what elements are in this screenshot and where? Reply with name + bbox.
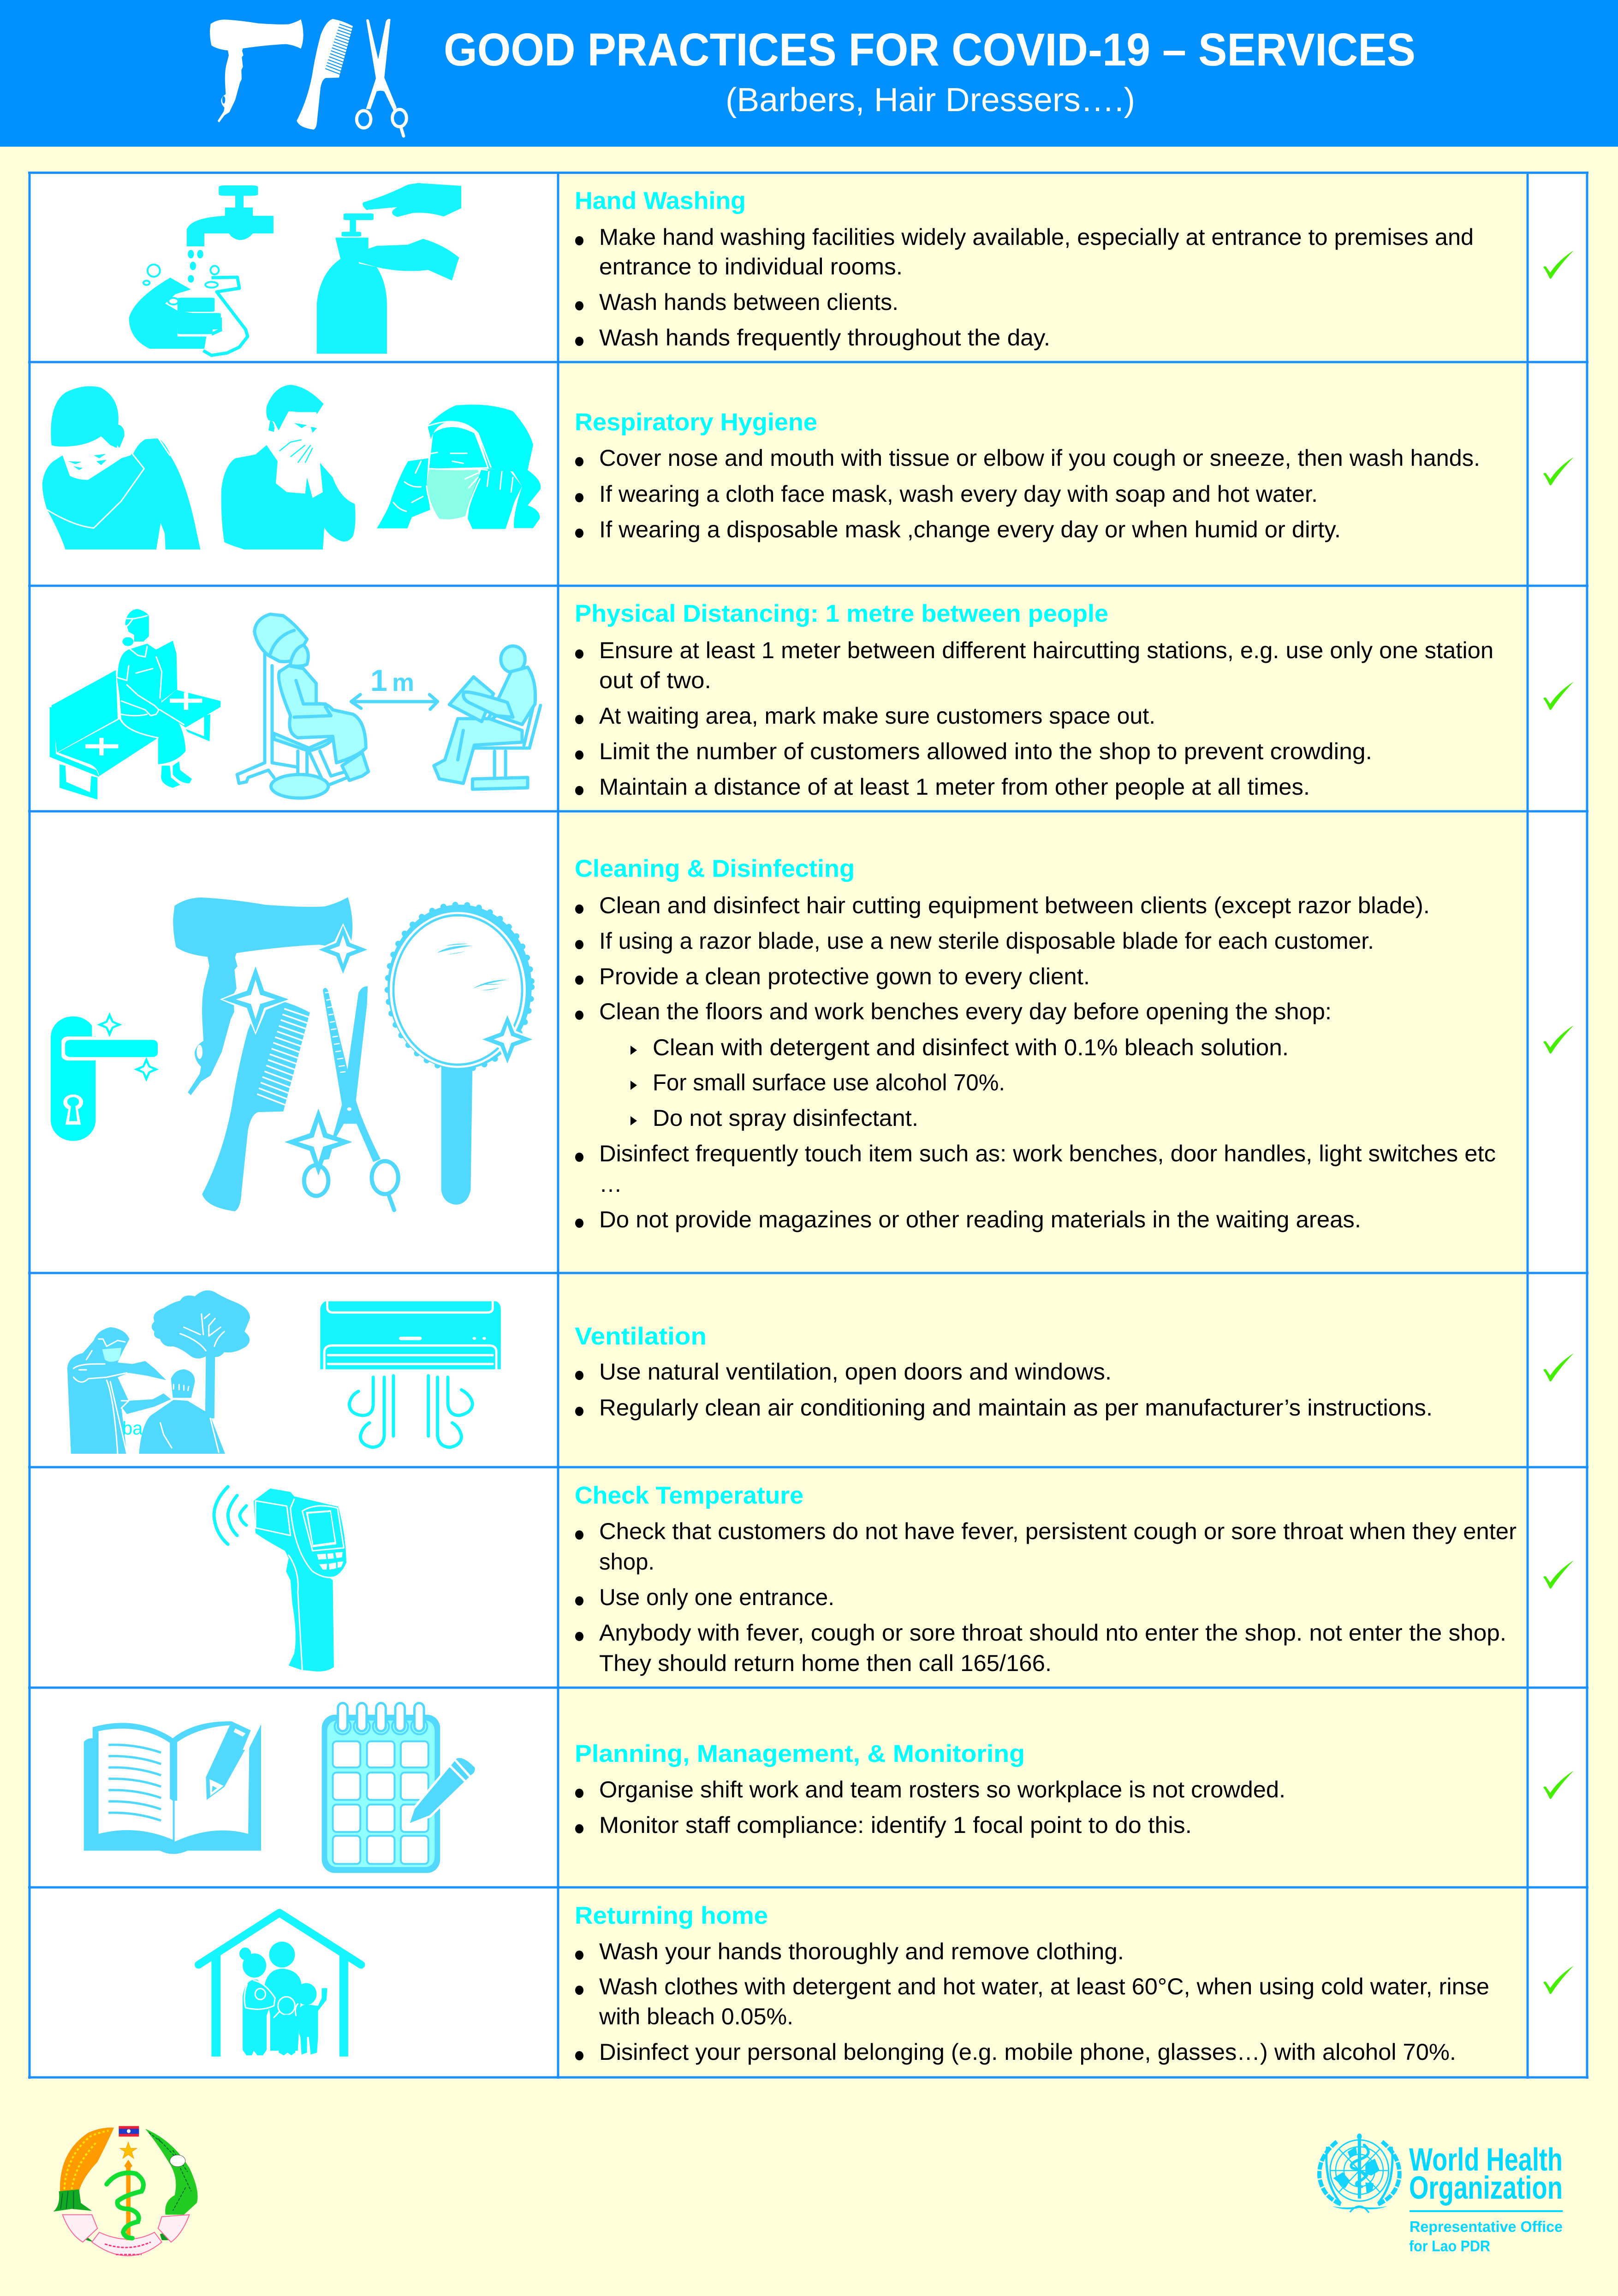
heading: Ventilation bbox=[575, 1323, 707, 1350]
bullet list bbox=[575, 1939, 1489, 2065]
header banner bbox=[0, 0, 1618, 147]
bullet list: Do not spray disinfectant. bbox=[653, 1105, 918, 1131]
panel: Cleaning and Disinfecting bbox=[51, 855, 1574, 1232]
bullet list bbox=[575, 892, 1496, 1232]
bullet list: entrance to individual rooms. bbox=[599, 254, 903, 280]
bullet list: If wearing a cloth face mask, wash every day with soap and hot water. bbox=[599, 481, 1318, 507]
bullet list: Ensure at least 1 meter between different haircutting stations, e.g. use only one station bbox=[599, 637, 1493, 663]
distance label: m bbox=[392, 669, 414, 696]
bullet list bbox=[575, 1359, 1433, 1421]
bullet list: Provide a clean protective gown to every client. bbox=[599, 964, 1090, 989]
icon: check mark bbox=[1543, 1966, 1574, 1994]
bullet list: Cover nose and mouth with tissue or elbow if you cough or sneeze, then wash hands. bbox=[599, 445, 1480, 471]
icon: tap and hand washing bbox=[129, 183, 461, 355]
bullet list: out of two. bbox=[599, 667, 711, 693]
panel: Check Temperature bbox=[214, 1482, 1574, 1676]
icon: check mark bbox=[1543, 250, 1574, 279]
logo: World Health Organization bbox=[1319, 2134, 1563, 2254]
title: GOOD PRACTICES FOR COVID-19 – SERVICES bbox=[444, 24, 1416, 76]
heading: Check Temperature bbox=[575, 1482, 803, 1509]
heading: Planning, Management, & Monitoring bbox=[575, 1740, 1025, 1767]
bullet list: Do not provide magazines or other reading materials in the waiting areas. bbox=[599, 1207, 1361, 1232]
icon: check mark bbox=[1543, 1771, 1574, 1799]
bullet list: Disinfect frequently touch item such as: work benches, door handles, light switches etc bbox=[599, 1141, 1496, 1166]
bullet list: with bleach 0.05%. bbox=[599, 2004, 793, 2029]
bullet list bbox=[575, 1518, 1517, 1676]
icon: check mark bbox=[1543, 457, 1574, 485]
bullet list bbox=[575, 445, 1480, 542]
emblem bbox=[1319, 2134, 1399, 2213]
icon: family inside a house bbox=[198, 1913, 361, 2057]
stray label on icon: ba bbox=[122, 1418, 143, 1439]
bullet list bbox=[575, 637, 1493, 800]
heading: Respiratory Hygiene bbox=[575, 409, 817, 436]
icon: hair dryer, comb and scissors bbox=[210, 19, 406, 136]
table cell backgrounds bbox=[30, 172, 1587, 2077]
logo: World Health Organization: Organization bbox=[1409, 2170, 1563, 2206]
bullet list: Use natural ventilation, open doors and windows. bbox=[599, 1359, 1112, 1385]
icon: check mark bbox=[1543, 1353, 1574, 1381]
organization name: World Health bbox=[1409, 2141, 1563, 2177]
bullet list: Anybody with fever, cough or sore throat should nto enter the shop. not enter the shop. bbox=[599, 1620, 1506, 1646]
bullet list: They should return home then call 165/166. bbox=[599, 1650, 1052, 1676]
bullet list: Wash hands between clients. bbox=[599, 289, 898, 315]
heading: Hand Washing bbox=[575, 187, 746, 214]
icon: seated customers one metre apart bbox=[50, 609, 541, 800]
panel: Planning, Management and Monitoring bbox=[84, 1703, 1574, 1873]
panel: Physical Distancing bbox=[50, 600, 1574, 800]
bullet list bbox=[575, 224, 1474, 351]
bullet list: Clean with detergent and disinfect with 0.1% bleach solution. bbox=[653, 1035, 1289, 1060]
icon: door handle, dryer, comb, scissors and mirror with sparkles bbox=[51, 897, 535, 1211]
bullet list: Regularly clean air conditioning and maintain as per manufacturer’s instructions. bbox=[599, 1395, 1433, 1421]
bullet list: Monitor staff compliance: identify 1 focal point to do this. bbox=[599, 1812, 1192, 1838]
office name: Representative Office bbox=[1410, 2218, 1563, 2235]
bullet list bbox=[575, 1777, 1285, 1838]
logo: World Health Organization: for Lao PDR bbox=[1409, 2237, 1490, 2254]
panel: Respiratory Hygiene bbox=[42, 385, 1574, 549]
bullet list: For small surface use alcohol 70%. bbox=[653, 1070, 1005, 1095]
icon: check mark bbox=[1543, 682, 1574, 710]
heading: Physical Distancing: 1 metre between people bbox=[575, 600, 1108, 627]
bullet list: If wearing a disposable mask ,change every day or when humid or dirty. bbox=[599, 517, 1341, 542]
icon: outdoor haircut and air conditioner bbox=[67, 1291, 501, 1454]
bullet list: Wash hands frequently throughout the day. bbox=[599, 325, 1050, 351]
distance label: 1 bbox=[370, 663, 387, 697]
logo: Lao Ministry of Health emblem bbox=[54, 2126, 197, 2256]
icon: check mark bbox=[1543, 1025, 1574, 1053]
panel: Returning home bbox=[198, 1902, 1574, 2065]
bullet list: Wash clothes with detergent and hot water, at least 60°C, when using cold water, rinse bbox=[599, 1974, 1489, 1999]
bullet list: Disinfect your personal belonging (e.g. mobile phone, glasses…) with alcohol 70%. bbox=[599, 2039, 1456, 2065]
panel: Hand Washing bbox=[129, 183, 1574, 355]
icon: notebook and calendar with pencils bbox=[84, 1703, 476, 1873]
heading: Cleaning & Disinfecting bbox=[575, 855, 855, 882]
bullet list: Make hand washing facilities widely available, especially at entrance to premises and bbox=[599, 224, 1474, 250]
icon: check mark bbox=[1543, 1560, 1574, 1588]
panel: Ventilation bbox=[67, 1291, 1574, 1454]
bullet list: At waiting area, mark make sure customers space out. bbox=[599, 703, 1155, 729]
bullet list: Clean the floors and work benches every day before opening the shop: bbox=[599, 999, 1332, 1024]
icon: coughing into elbow, sneezing into tissue, fitting a mask bbox=[42, 385, 541, 549]
bullet list: shop. bbox=[599, 1549, 654, 1575]
bullet list: Limit the number of customers allowed into the shop to prevent crowding. bbox=[599, 738, 1372, 764]
bullet list: Clean and disinfect hair cutting equipment between clients (except razor blade). bbox=[599, 892, 1430, 918]
bullet list: … bbox=[599, 1171, 622, 1197]
subtitle: (Barbers, Hair Dressers….) bbox=[726, 82, 1135, 119]
heading: Returning home bbox=[575, 1902, 768, 1929]
bullet list: If using a razor blade, use a new sterile disposable blade for each customer. bbox=[599, 928, 1374, 954]
bullet list: Organise shift work and team rosters so workplace is not crowded. bbox=[599, 1777, 1285, 1802]
bullet list: Check that customers do not have fever, persistent cough or sore throat when they enter bbox=[599, 1518, 1517, 1544]
bullet list: Wash your hands thoroughly and remove clothing. bbox=[599, 1939, 1124, 1964]
bullet list: Use only one entrance. bbox=[599, 1584, 834, 1610]
bullet list: Maintain a distance of at least 1 meter from other people at all times. bbox=[599, 774, 1310, 800]
icon: infrared thermometer bbox=[214, 1487, 346, 1671]
